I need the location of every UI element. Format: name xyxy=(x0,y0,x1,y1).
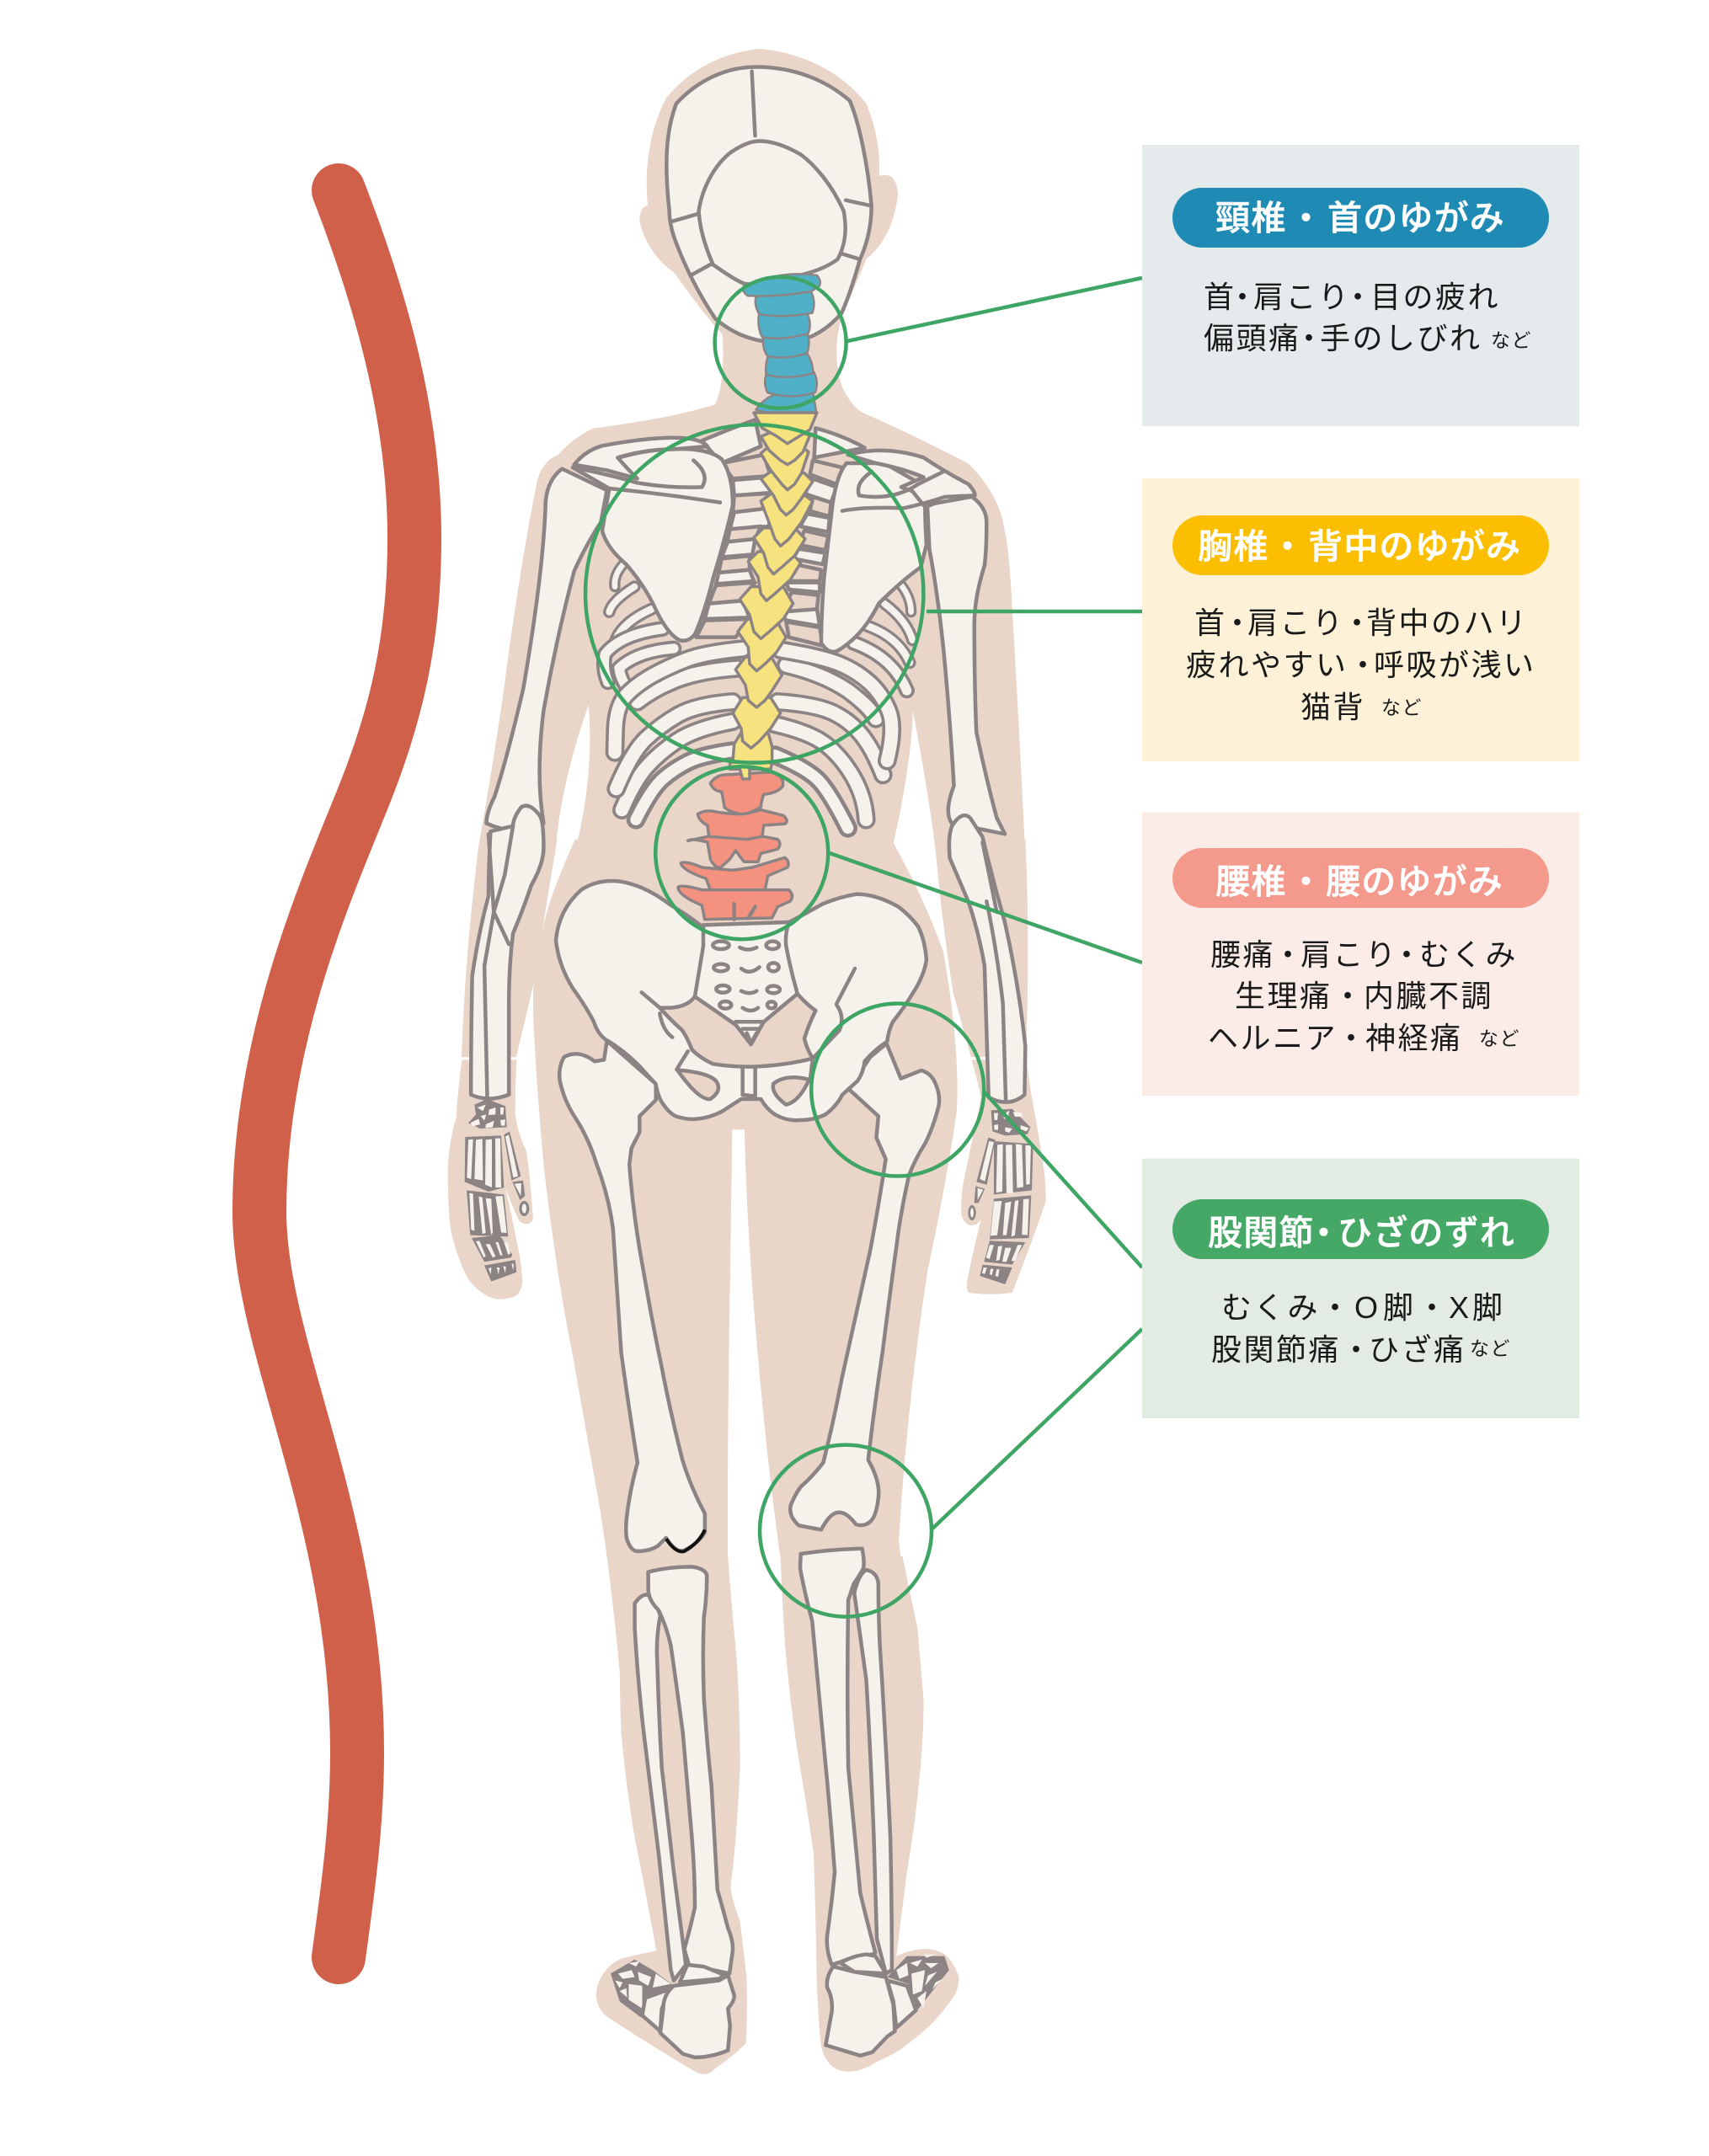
heading pill: lumbar: 腰のゆがみ xyxy=(1326,862,1503,901)
symptom text: cervical: 目の疲れ xyxy=(1370,280,1500,314)
panel: cervical xyxy=(1142,145,1579,426)
thoracic vertebrae (yellow) xyxy=(730,413,817,779)
symptom text: lumbar: ・ xyxy=(1391,937,1424,972)
symptom text: hip and knee: ・ xyxy=(1417,1290,1450,1325)
green highlight circles xyxy=(585,277,984,1617)
side ribs left xyxy=(604,564,743,819)
heading pill: lumbar xyxy=(1172,848,1549,908)
left foot xyxy=(611,1960,734,2057)
symptom text: hip and knee: 脚 xyxy=(1383,1290,1416,1325)
symptom text: hip and knee xyxy=(1211,1290,1511,1367)
symptom text: thoracic: など xyxy=(1381,696,1423,718)
symptom text: cervical: ・ xyxy=(1343,280,1375,314)
symptom text: lumbar: 肩こり xyxy=(1300,937,1398,972)
heading pill: hip and knee xyxy=(1172,1199,1549,1259)
symptom text: cervical: 手のしびれ xyxy=(1320,321,1482,355)
symptom text: cervical: ・ xyxy=(1294,321,1327,355)
symptom text: thoracic: 背中のハリ xyxy=(1366,606,1529,640)
symptom text: hip and knee: 股関節痛 xyxy=(1211,1332,1341,1367)
heading pill: hip and knee: ・ xyxy=(1306,1214,1342,1252)
symptom text: hip and knee: ・ xyxy=(1341,1332,1374,1367)
symptom text: lumbar: ・ xyxy=(1273,937,1306,972)
symptom text: hip and knee: ひざ痛 xyxy=(1369,1332,1466,1367)
obturator openings xyxy=(678,1070,718,1099)
symptom text: cervical: 偏頭痛 xyxy=(1204,321,1301,355)
symptom text: cervical: など xyxy=(1491,329,1532,351)
heading pill: cervical: ・ xyxy=(1289,199,1324,237)
arm bones: humerus and forearm xyxy=(471,469,1025,1102)
heading pill: thoracic: ・ xyxy=(1270,527,1306,566)
lower leg and foot bones xyxy=(611,1549,949,2057)
upper ribs left xyxy=(697,455,772,638)
symptom text: thoracic: ・ xyxy=(1222,606,1255,640)
pelvic cavity xyxy=(660,994,815,1067)
curved spine line: red S-curve xyxy=(259,190,414,1957)
heading pill: cervical: 首のゆがみ xyxy=(1327,199,1505,237)
heading pill: thoracic xyxy=(1172,515,1549,575)
panel: lumbar xyxy=(1142,812,1579,1096)
symptom text: lumbar xyxy=(1208,937,1520,1055)
thoracic and lumbar spine xyxy=(678,413,817,920)
left fibula and tibia xyxy=(635,1595,686,1981)
heading pill: lumbar: 腰椎 xyxy=(1215,862,1286,901)
heading pill: thoracic: 背中のゆがみ xyxy=(1308,527,1521,566)
symptom text: thoracic: 首 xyxy=(1194,606,1227,640)
symptom text: thoracic: 肩こり xyxy=(1247,606,1345,640)
upper ribs right xyxy=(781,461,848,646)
heading pill: cervical: 頸椎 xyxy=(1215,199,1286,237)
symptom text: lumbar: など xyxy=(1479,1027,1520,1049)
cervical spine (blue) xyxy=(743,274,820,415)
connector lines from circles to panels xyxy=(830,278,1142,1529)
symptom text: cervical xyxy=(1204,280,1532,355)
symptom text: hip and knee: など xyxy=(1470,1337,1511,1359)
symptom text: hip and knee: O xyxy=(1354,1290,1381,1325)
skull xyxy=(666,67,872,343)
symptom text: lumbar: むくみ xyxy=(1419,937,1518,972)
symptom text: lumbar: ・ xyxy=(1332,979,1365,1013)
side ribs right xyxy=(775,585,912,828)
symptom text: hip and knee: むくみ xyxy=(1221,1290,1320,1325)
heading pill: thoracic: 胸椎 xyxy=(1198,527,1268,566)
femurs xyxy=(559,1041,939,1551)
right hand bones xyxy=(968,1109,1033,1284)
lumbar vertebrae (red) xyxy=(678,772,792,920)
symptom text: thoracic: 呼吸が浅い xyxy=(1374,648,1536,682)
top rib bands xyxy=(702,419,865,463)
symptom text: thoracic xyxy=(1186,606,1536,724)
symptom text: thoracic: 猫背 xyxy=(1300,690,1365,724)
symptom text: lumbar: 生理痛 xyxy=(1235,979,1332,1013)
symptom text: lumbar: ・ xyxy=(1336,1021,1369,1055)
panel: hip and knee xyxy=(1142,1159,1579,1418)
left hand bones xyxy=(465,1099,529,1282)
symptom text: thoracic: ・ xyxy=(1342,606,1375,640)
sacral foramina xyxy=(713,942,780,1011)
sacrum xyxy=(695,922,798,1044)
symptom text: lumbar: 内臓不調 xyxy=(1364,979,1493,1013)
symptom text: cervical: 首 xyxy=(1204,280,1236,314)
right scapula and clavicle xyxy=(821,451,975,652)
symptom text: hip and knee: 脚 xyxy=(1472,1290,1505,1325)
symptom text: cervical: 肩こり xyxy=(1253,280,1351,314)
symptom text: lumbar: 神経痛 xyxy=(1365,1021,1463,1055)
heading pill: lumbar: ・ xyxy=(1289,862,1324,901)
symptom text: lumbar: 腰痛 xyxy=(1210,937,1275,972)
right fibula and tibia xyxy=(854,1570,892,1973)
panel: thoracic xyxy=(1142,478,1579,761)
body figure with skeleton xyxy=(448,49,1046,2074)
heading pill: hip and knee: ひざのずれ xyxy=(1338,1214,1515,1252)
symptom text: hip and knee: X xyxy=(1449,1290,1471,1325)
symptom text: lumbar: ヘルニア xyxy=(1208,1021,1338,1055)
heading pill: hip and knee: 股関節 xyxy=(1208,1214,1315,1252)
skin silhouette: head, torso, arms, legs xyxy=(448,49,1046,2074)
symptom text: thoracic: ・ xyxy=(1348,648,1381,682)
right foot xyxy=(825,1955,949,2056)
symptom text: thoracic: 疲れやすい xyxy=(1186,648,1349,682)
left scapula and clavicle xyxy=(573,438,733,641)
rib cage xyxy=(573,419,975,828)
heading pill: cervical xyxy=(1172,188,1549,248)
symptom text: cervical: ・ xyxy=(1227,280,1260,314)
symptom text: hip and knee: ・ xyxy=(1320,1290,1353,1325)
pelvis and sacrum xyxy=(556,881,927,1120)
